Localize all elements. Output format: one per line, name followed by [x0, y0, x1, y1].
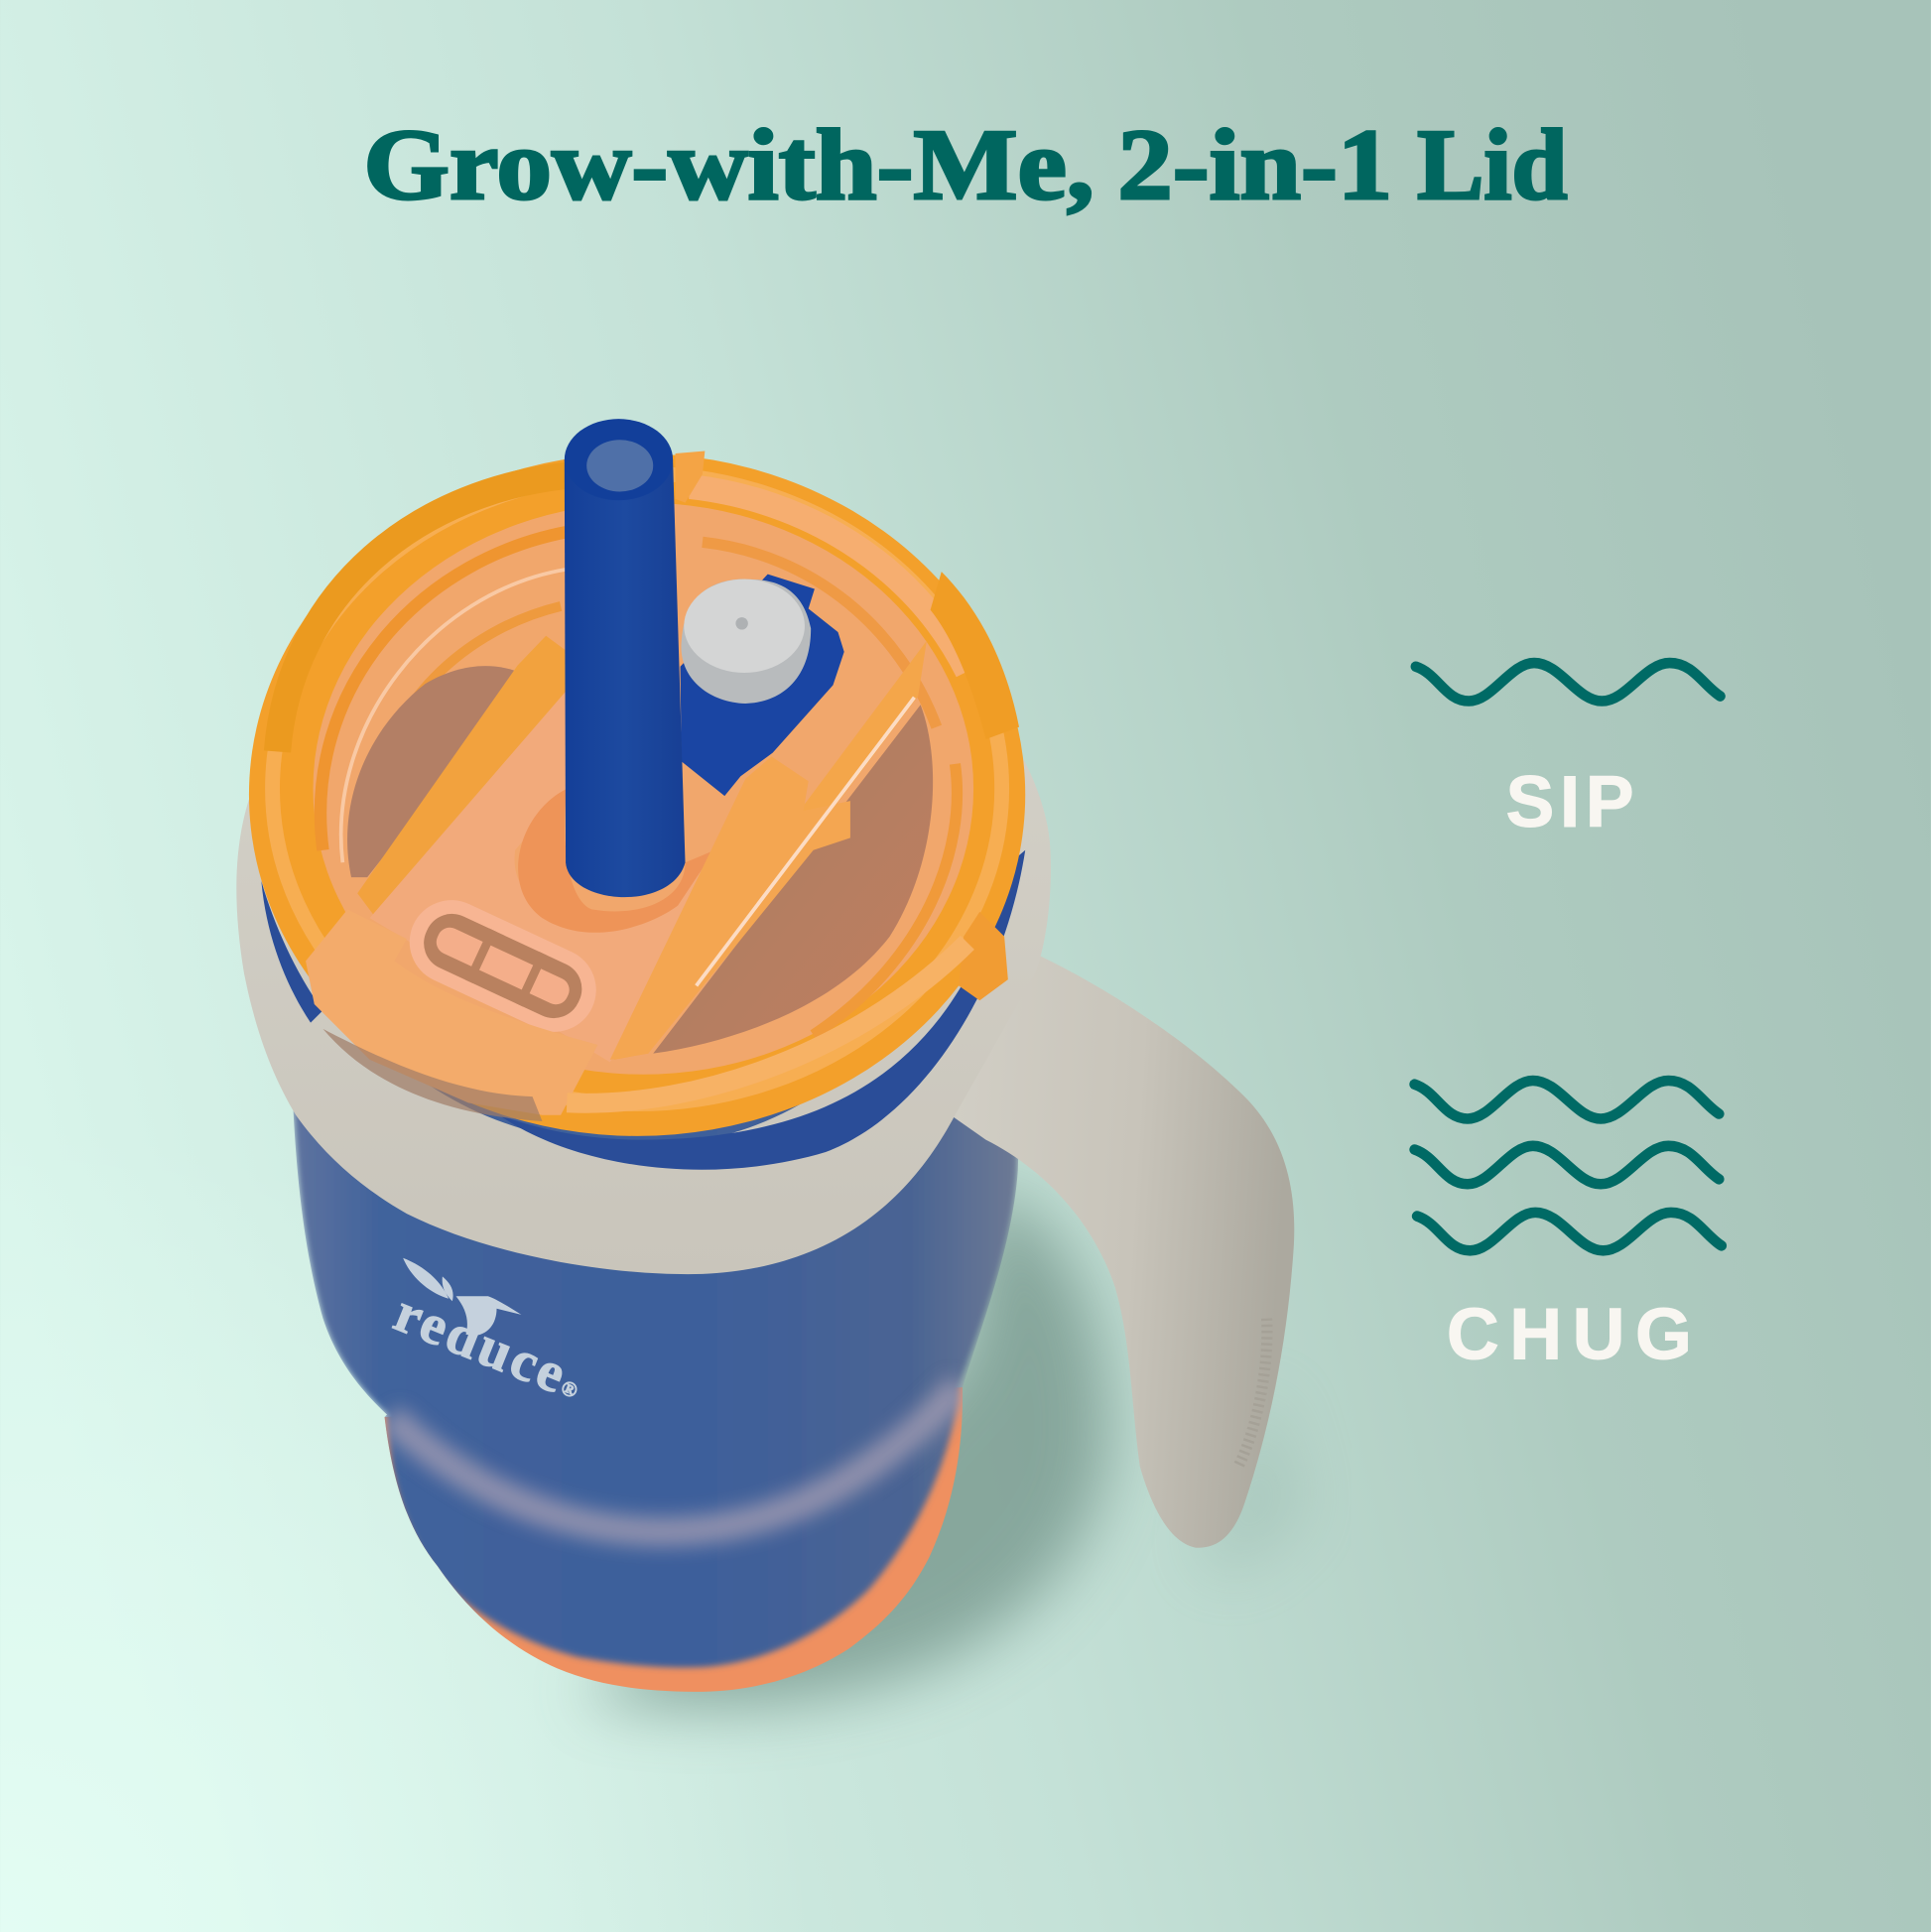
diagonal rib right: [613, 641, 927, 1060]
blue valve plate: [681, 575, 844, 796]
chug wave icon: [1415, 1081, 1722, 1250]
lid outer rim: [249, 453, 1025, 1136]
logo wordmark: ®: [558, 1375, 584, 1404]
lid tab right: [959, 912, 1008, 1000]
brand logo: [386, 1258, 594, 1414]
lid tab bottom left: [306, 909, 597, 1115]
tumbler: [236, 419, 1294, 1692]
title: [363, 109, 1568, 221]
sip wave icon: [1416, 663, 1721, 702]
sip label: SIP: [1505, 761, 1634, 842]
tumbler body: [292, 1085, 1020, 1667]
lid inner well: [314, 503, 973, 1075]
cast shadow of tumbler: [579, 1183, 1306, 1707]
grey silicone plug: [681, 580, 811, 704]
logo wordmark: reduce: [386, 1281, 578, 1407]
silicone handle: [924, 943, 1294, 1548]
body highlight band: [390, 1386, 962, 1532]
lid tab top right: [931, 572, 1019, 739]
lid tab top: [676, 451, 705, 503]
tumbler base: orange rim: [385, 1387, 963, 1692]
title: 2-in-1: [1117, 109, 1392, 221]
straw: [565, 419, 686, 897]
handle embossed text: [1238, 1319, 1267, 1467]
silicone ring: [236, 758, 1051, 1274]
title: Lid: [1417, 109, 1568, 221]
straw hole slot: [518, 789, 714, 933]
navy collar: [261, 850, 1025, 1170]
lid floor left: [347, 666, 526, 877]
center panel: [370, 690, 789, 1062]
lid floor right: [653, 705, 933, 1054]
vent oval: [396, 886, 610, 1046]
title: Grow-with-Me,: [363, 109, 1094, 221]
logo leaves: [403, 1258, 521, 1336]
diagonal rib left: [357, 636, 570, 918]
lid bottom rim gloss: [567, 943, 967, 1103]
chug label: CHUG: [1447, 1294, 1692, 1375]
